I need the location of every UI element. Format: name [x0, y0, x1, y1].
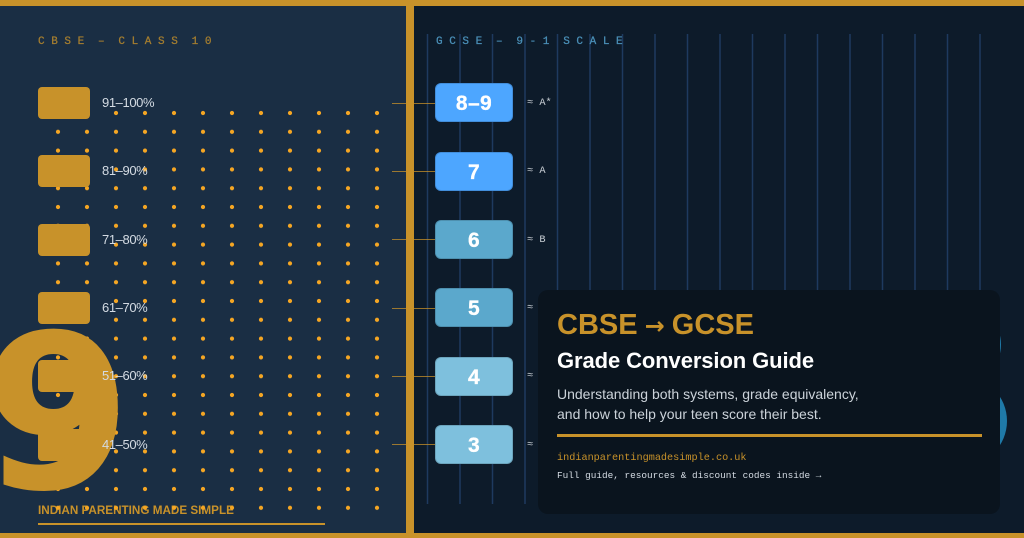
GCSE grade chips: 4	[468, 366, 480, 389]
old grade equivalents: ≈ A*	[527, 97, 552, 109]
GCSE grade chips	[435, 83, 513, 464]
centre divider	[406, 0, 414, 538]
old grade equivalents: ≈	[527, 370, 533, 382]
GCSE grade chips: 3	[468, 434, 480, 457]
brand line: Indian Parenting Made Simple: INDIAN PARENTING MADE SIMPLE	[38, 504, 234, 516]
gold rule	[557, 434, 982, 436]
GCSE grade chips: 8–9	[456, 92, 492, 115]
old grade equivalents: ≈	[527, 438, 533, 450]
GCSE grade chips: 7	[468, 161, 480, 184]
description text	[557, 386, 859, 422]
description text: Understanding both systems, grade equivalency,	[557, 386, 859, 402]
GCSE grade chips: 5	[468, 297, 480, 320]
old grade equivalents: ≈ A	[527, 165, 546, 177]
old grade equivalents: ≈ B	[527, 234, 546, 246]
GCSE grade chips: 6	[468, 229, 480, 252]
description text: and how to help your teen score their best.	[557, 406, 822, 422]
CBSE percentage labels: 71–80%	[102, 232, 147, 246]
subtitle: Grade Conversion Guide: Grade Conversion Guide	[557, 348, 814, 373]
website url: indianparentingmadesimple.co.uk	[557, 453, 747, 464]
CBSE percentage labels: 41–50%	[102, 436, 147, 452]
CBSE grade boxes	[38, 87, 90, 461]
old grade equivalents	[527, 97, 552, 450]
CBSE percentage labels: 61–70%	[102, 300, 147, 315]
panel: title card	[538, 290, 1000, 514]
call to action: Full guide, resources & discount codes inside →	[557, 470, 821, 480]
title: CBSE to GCSE: CBSE → GCSE	[557, 309, 754, 341]
top gold bar	[0, 0, 1024, 6]
CBSE percentage labels	[102, 95, 154, 452]
dot grid	[56, 110, 380, 510]
panel: CBSE left background	[0, 0, 406, 538]
heading: GCSE 9-1 scale: GCSE – 9-1 SCALE	[436, 36, 629, 48]
CBSE percentage labels: 51–60%	[102, 368, 147, 383]
old grade equivalents: ≈	[527, 302, 533, 314]
bottom gold bar	[0, 533, 1024, 538]
CBSE percentage labels: 81–90%	[102, 163, 147, 178]
CBSE percentage labels: 91–100%	[102, 95, 154, 110]
heading: CBSE class 10: CBSE – CLASS 10	[38, 36, 218, 48]
connector lines CBSE to GCSE	[392, 103, 435, 445]
